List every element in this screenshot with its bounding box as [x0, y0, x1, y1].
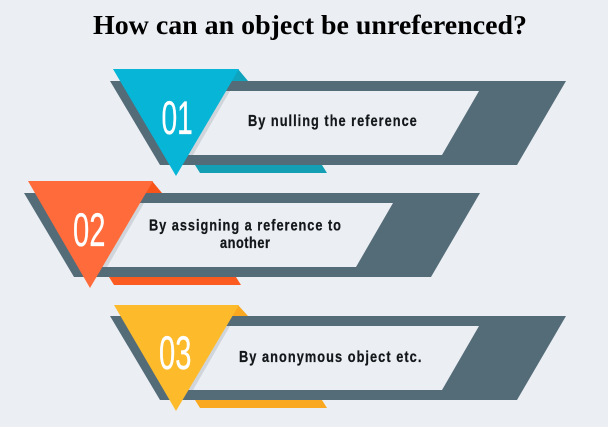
triangle fold: [228, 305, 248, 316]
label: By anonymous object etc.: [239, 349, 421, 366]
ribbon: dark parallelogram: [110, 81, 566, 165]
label: another: [220, 235, 270, 252]
panel: item 02: [24, 181, 480, 288]
label: By nulling the reference: [248, 113, 417, 130]
number: 01: [162, 93, 193, 145]
text card: [185, 91, 479, 155]
triangle fold: [228, 69, 248, 81]
accent strip: amber: [195, 400, 327, 408]
panel: item 03: [110, 305, 566, 411]
triangle badge: [28, 181, 153, 288]
label: [149, 217, 341, 252]
triangle badge: [113, 69, 239, 176]
accent strip: orange: [109, 277, 241, 285]
number: 03: [159, 328, 191, 380]
text card: [185, 326, 479, 390]
title: How can an object be unreferenced?: [93, 10, 527, 40]
text card: [99, 203, 393, 267]
panel: item 01: [110, 69, 566, 176]
triangle fold: [142, 181, 162, 193]
ribbon: dark parallelogram: [110, 316, 566, 400]
number: 02: [73, 205, 105, 257]
card shadow: [187, 326, 230, 390]
ribbon: dark parallelogram: [24, 193, 480, 277]
card shadow: [101, 203, 144, 267]
accent strip: teal: [195, 165, 327, 173]
card shadow: [187, 91, 230, 155]
triangle badge: [114, 305, 239, 411]
label: By assigning a reference to: [149, 217, 341, 235]
